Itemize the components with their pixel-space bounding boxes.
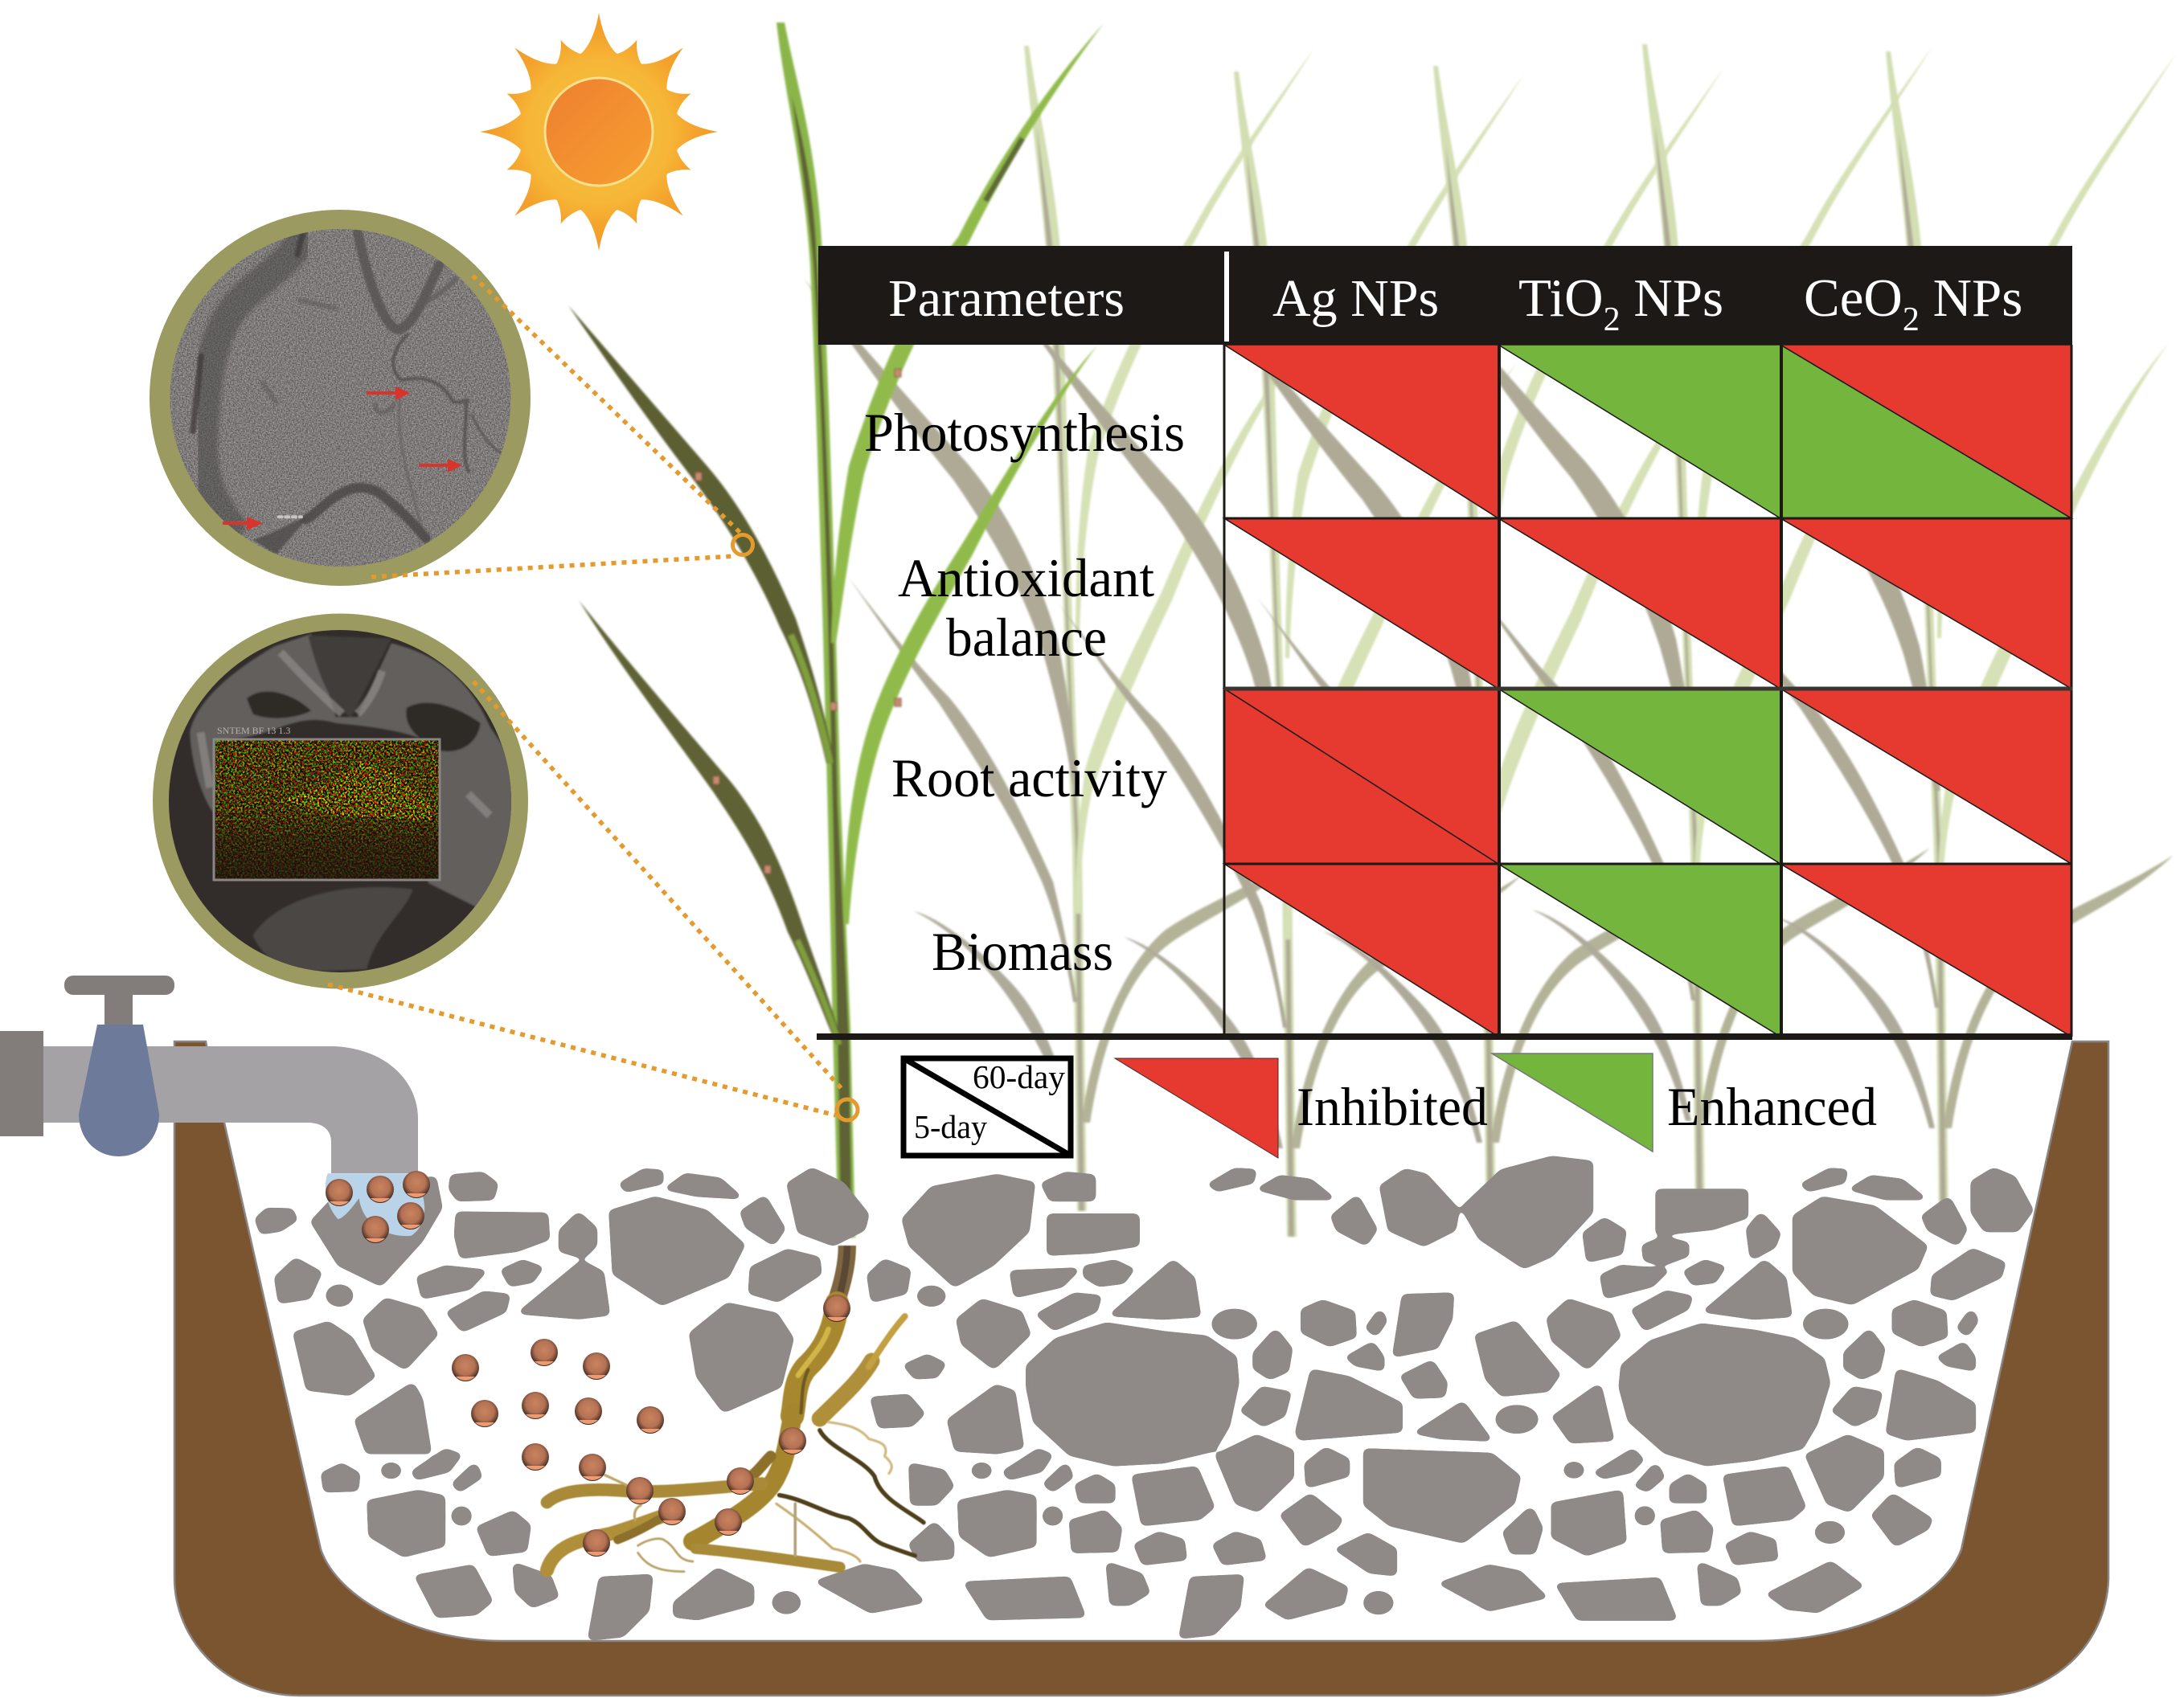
background plant 2: [1014, 72, 1524, 1237]
micrograph caption: SNTEM BF 13 1.3: [217, 725, 290, 736]
header: Parameters: Parameters: [888, 269, 1125, 328]
background plant 4: [1422, 44, 1932, 1209]
dotted callout lines: leaf: [371, 276, 740, 577]
label: Antioxidant balance: balance: [946, 607, 1107, 668]
water from faucet: [326, 1173, 424, 1236]
micrograph: leaf: [150, 210, 531, 586]
header: CeO2 NPs: NPs: [1920, 268, 2022, 328]
particles in soil: [452, 1339, 664, 1481]
particles at water outlet: [326, 1171, 430, 1243]
legend swatch: inhibited: [1115, 1058, 1278, 1158]
legend key: 60-day / 5-day: 5-day: [914, 1108, 987, 1145]
lower left leaf: [579, 600, 842, 1045]
soil container: [174, 1041, 2108, 1696]
header: TiO2 NPs: 2: [1604, 301, 1621, 338]
result triangles: [1224, 345, 2071, 1037]
table header: [818, 246, 2072, 345]
dotted callout lines: root: [328, 681, 844, 1115]
background plant 5: [1666, 51, 2176, 1217]
central leaf and stem: [776, 23, 855, 1238]
label: Root activity: Root activity: [891, 747, 1167, 808]
soil rocks left: [260, 1171, 1091, 1637]
data table: [817, 246, 2072, 1037]
legend label: Enhanced: Enhanced: [1667, 1076, 1877, 1137]
arrows pointing at nanoparticles: [223, 387, 462, 530]
header: CeO2 NPs: 2: [1903, 301, 1920, 338]
legend key: 60-day / 5-day: [904, 1058, 1071, 1156]
faucet valve: [79, 1025, 159, 1156]
lower right leaf: [844, 346, 1097, 924]
header: CeO2 NPs: CeO: [1804, 268, 1903, 328]
sun: [480, 13, 718, 251]
callout marker: stem base: [837, 1099, 858, 1120]
header: Ag NPs: Ag NPs: [1272, 269, 1439, 328]
background plant 3: [1213, 66, 1723, 1231]
faucet handle: [64, 976, 174, 1026]
particles on roots: [583, 1295, 850, 1557]
upper right leaf: [831, 23, 1104, 643]
table grid: [817, 345, 2072, 1037]
label: Biomass: Biomass: [932, 921, 1113, 982]
main rice plant: [568, 23, 1104, 1238]
legend swatch: enhanced: [1492, 1054, 1653, 1152]
legend key: 60-day / 5-day: 60-day: [973, 1058, 1065, 1095]
nanoparticles: [326, 1171, 850, 1557]
root system: [547, 1246, 924, 1572]
legend: [904, 1054, 1877, 1158]
callout marker: leaf: [733, 535, 752, 554]
soil rocks right: [1031, 1159, 2029, 1636]
header: TiO2 NPs: NPs: [1621, 268, 1723, 328]
faucet flange: [0, 1031, 43, 1136]
micrograph: root with element map: [153, 614, 528, 988]
upper left leaf: [568, 305, 834, 763]
nanoparticle marks on leaves: [695, 369, 901, 874]
row labels: [864, 402, 1185, 982]
label: Antioxidant balance: Antioxidant: [898, 547, 1154, 608]
legend label: Inhibited: Inhibited: [1297, 1076, 1488, 1137]
header: TiO2 NPs: TiO: [1518, 268, 1604, 328]
faucet pipe: [43, 1046, 418, 1173]
background plant 1: [804, 46, 1314, 1211]
faucet: [0, 976, 418, 1173]
label: Photosynthesis: Photosynthesis: [864, 402, 1185, 463]
